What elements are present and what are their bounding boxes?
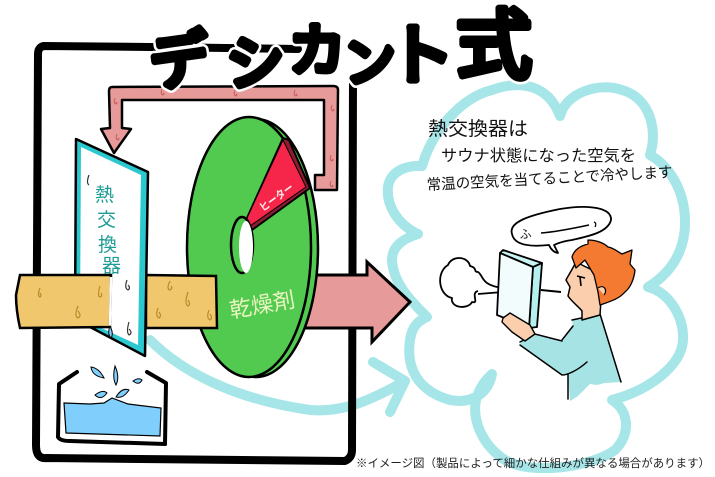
title: ト — [388, 18, 454, 92]
eye — [577, 276, 585, 286]
title: カ — [289, 19, 345, 82]
title: シ — [224, 29, 287, 98]
wheel centre hole — [231, 217, 253, 273]
ear — [598, 287, 606, 295]
cloud outline — [388, 85, 685, 468]
speech bubble — [512, 207, 611, 253]
title: デ — [145, 24, 214, 99]
breath line — [541, 290, 561, 292]
title: ン — [341, 31, 399, 94]
speech bubble: ふ — [518, 226, 532, 242]
shirt — [520, 314, 621, 401]
heater segment — [247, 138, 310, 230]
right yellow duct — [146, 275, 217, 328]
heat exchanger label: 交 — [97, 209, 116, 231]
person — [497, 240, 635, 401]
title — [145, 4, 532, 99]
footnote: ※イメージ図（製品によって細かな仕組みが異なる場合があります） — [356, 456, 710, 470]
hands — [502, 313, 535, 341]
cloud explanation text — [426, 118, 673, 194]
pink dry air arrow — [300, 262, 410, 342]
hair — [572, 240, 635, 305]
recirculating hot air duct — [101, 86, 338, 190]
left yellow duct — [16, 275, 111, 328]
water tray — [58, 326, 166, 444]
cloud explanation text: サウナ状態になった空気を — [441, 147, 636, 165]
title: デ — [145, 24, 214, 99]
heat exchanger label: 熱 — [95, 184, 114, 206]
face — [566, 262, 601, 320]
heat exchanger label: 器 — [102, 256, 121, 277]
cloud explanation text: 熱交換器は — [428, 118, 528, 140]
main outer frame — [36, 46, 353, 461]
desiccant wheel — [187, 117, 318, 377]
heat exchanger panel — [75, 139, 148, 356]
title: 式 — [456, 4, 532, 89]
puff of air — [440, 258, 503, 307]
heater segment: ヒーター — [257, 181, 296, 214]
heat exchanger label: 換 — [98, 234, 117, 256]
cloud explanation text: 常温の空気を当てることで冷やします — [426, 164, 673, 194]
title: カ — [289, 19, 345, 82]
sweat drops — [38, 175, 212, 335]
book — [497, 250, 542, 328]
cooling air arrow — [150, 340, 405, 412]
title: ン — [341, 31, 399, 94]
title: 式 — [456, 4, 532, 89]
title: シ — [224, 29, 287, 98]
desiccant label: 乾燥剤 — [228, 287, 297, 323]
heat exchanger label — [95, 184, 121, 277]
title: ト — [388, 18, 454, 92]
